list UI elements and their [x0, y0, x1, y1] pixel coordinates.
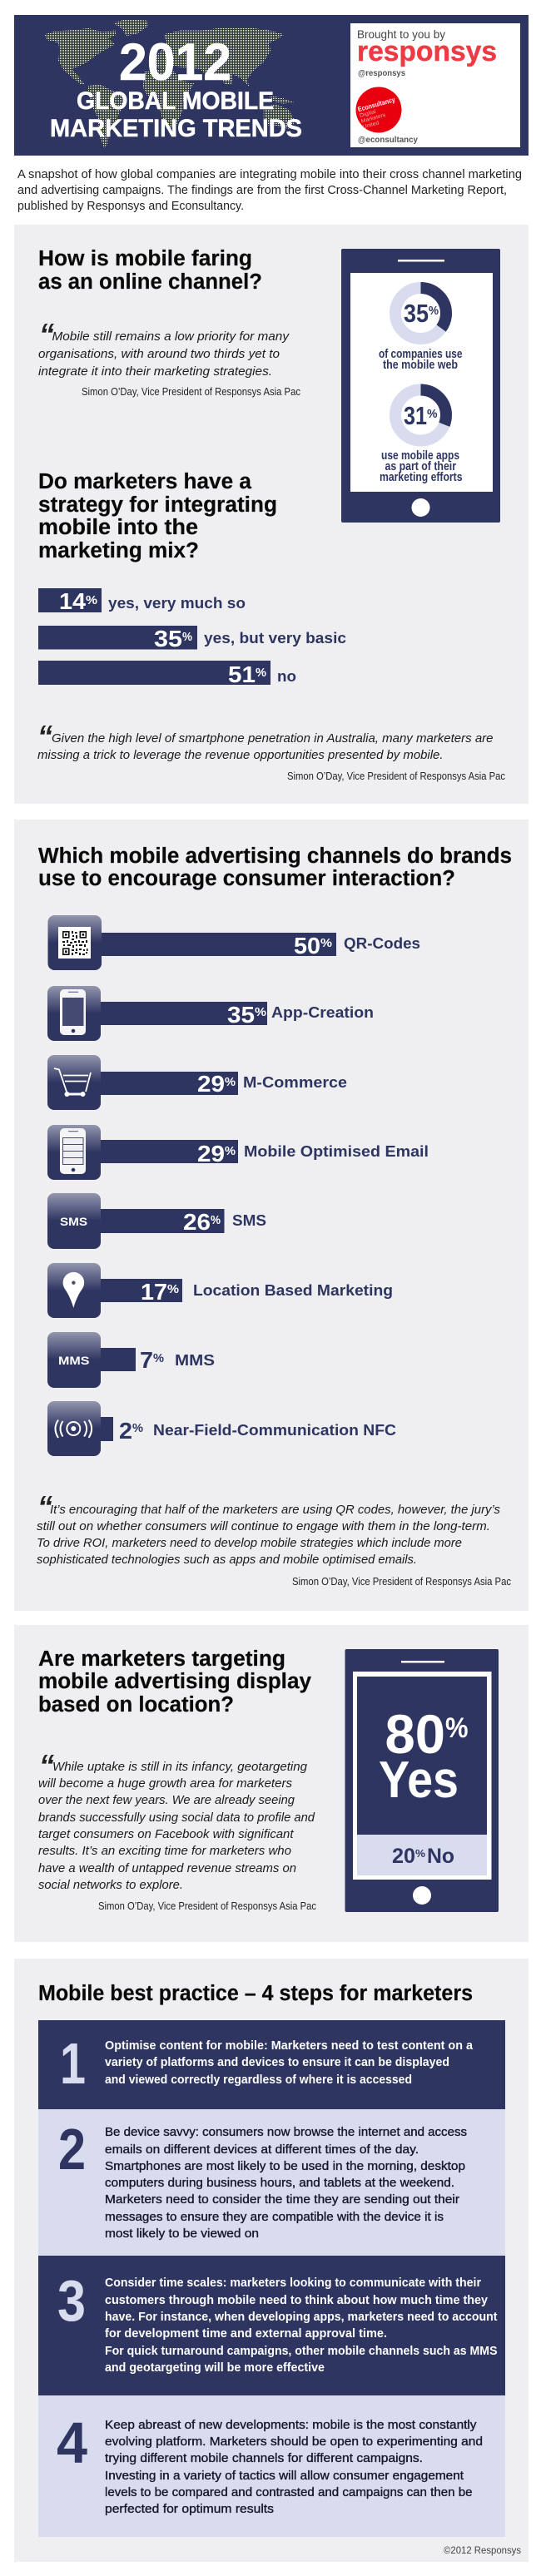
title: GLOBAL MOBILE	[77, 87, 274, 115]
quote: geotargeting: results. It’s an exciting time for marketers who	[38, 1845, 291, 1858]
bar chart: strategy: no	[277, 667, 296, 685]
heading: location: based on location?	[38, 1693, 234, 1717]
channel: M-Commerce: %	[225, 1075, 236, 1089]
step 2: 2	[58, 2117, 86, 2182]
heading: online channel: How is mobile faring	[38, 247, 252, 270]
quote: QR codes: sophisticated technologies such as apps and mobile optimised emails.	[37, 1553, 417, 1567]
heading: location	[38, 1647, 312, 1717]
step 4: Keep abreast of new developments: mobile is the most constantly	[105, 2419, 477, 2432]
step 2: most likely to be viewed on	[105, 2227, 259, 2241]
quote: QR codes: still out on whether consumers will continue to engage with them in the long-term.	[37, 1520, 490, 1533]
responsys logo: responsys	[357, 36, 497, 67]
quote: geotargeting: Simon O’Day, Vice President of Responsys Asia Pac	[98, 1900, 316, 1912]
channel: App-Creation: App-Creation	[271, 1003, 374, 1021]
channel: SMS: %	[211, 1213, 221, 1227]
icon: smartphone	[60, 989, 86, 1035]
quote: geotargeting: While uptake is still in its infancy, geotargeting	[52, 1761, 307, 1774]
heading: strategy: marketing mix?	[38, 539, 199, 562]
step 2	[38, 2109, 505, 2256]
phone with donut charts	[341, 249, 500, 523]
donut: 35%	[379, 288, 463, 372]
sponsors box: Brought to you by	[357, 28, 445, 41]
bar chart: strategy: yes, very much so	[108, 594, 246, 612]
phone: 80% yes, 20% no	[345, 1649, 499, 1912]
quote: QR codes	[37, 1489, 511, 1588]
bar chart: strategy	[38, 588, 346, 687]
step 3: and geotargeting will be more effective	[105, 2361, 325, 2375]
step 4: Investing in a variety of tactics will allow consumer engagement	[105, 2469, 464, 2483]
heading: location: mobile advertising display	[38, 1670, 312, 1693]
intro text	[17, 168, 522, 213]
donut: 35%: of companies use	[379, 348, 463, 361]
heading: channels: use to encourage consumer interaction?	[38, 867, 455, 890]
channel: MMS: MMS	[175, 1351, 215, 1369]
channel: Location Based Marketing	[47, 1263, 393, 1318]
channel: QR-Codes	[48, 915, 420, 970]
heading: location: Are marketers targeting	[38, 1647, 285, 1671]
quote: smartphone penetration: missing a trick to leverage the revenue opportunities presented by mobile.	[37, 749, 443, 762]
sponsors box: @econsultancy	[358, 135, 418, 145]
quote: low priority: Simon O’Day, Vice President of Responsys Asia Pac	[82, 386, 300, 398]
donut: 35%: 35	[404, 299, 429, 328]
step 2: computers during business hours, and tablets at the weekend.	[105, 2177, 454, 2190]
title	[50, 33, 302, 142]
sponsors box: @responsys	[358, 68, 405, 78]
channel: Mobile Optimised Email	[47, 1125, 429, 1180]
panel: best practice	[14, 1959, 529, 2562]
quote: geotargeting: have a wealth of untapped revenue streams on	[38, 1862, 296, 1875]
channel: SMS: 26	[183, 1209, 211, 1235]
step 2: Smartphones are most likely to be used in the morning, desktop	[105, 2160, 465, 2173]
step 1: Optimise content for mobile: Marketers need to test content on a	[105, 2039, 474, 2053]
icon: shopping cart	[54, 1068, 91, 1097]
channel: NFC: %	[132, 1421, 143, 1435]
step 1	[38, 2020, 505, 2109]
channel: M-Commerce: M-Commerce	[243, 1073, 347, 1091]
heading: best practice: Mobile best practice – 4 steps for marketers	[38, 1982, 473, 2005]
channel: Location Based Marketing: %	[167, 1282, 179, 1296]
quote: smartphone penetration: “	[37, 719, 52, 753]
donut: 31%: use mobile apps	[381, 449, 459, 463]
step 2: messages to ensure they are compatible with the device it is	[105, 2211, 444, 2224]
econsultancy logo: United	[362, 120, 380, 130]
bar chart: strategy: 35	[154, 626, 182, 651]
bar chart: strategy: %	[182, 630, 192, 644]
step 4: perfected for optimum results	[105, 2503, 274, 2516]
step 3: customers through mobile need to think about how much time they	[105, 2294, 488, 2307]
channel: Location Based Marketing: Location Based Marketing	[193, 1281, 393, 1299]
econsultancy logo: Digital	[359, 109, 377, 119]
step 4: evolving platform. Marketers should be open to experimenting and	[105, 2435, 483, 2449]
heading: online channel: as an online channel?	[38, 270, 262, 294]
copyright: ©2012 Responsys	[444, 2544, 521, 2556]
step 3: Consider time scales: marketers looking to communicate with their	[105, 2276, 481, 2290]
donut: 31%	[380, 389, 463, 484]
quote: geotargeting: will become a huge growth area for marketers	[38, 1777, 292, 1791]
step 4: trying different mobile channels for different campaigns.	[105, 2452, 423, 2465]
step 1: 1	[60, 2031, 86, 2096]
step 2: emails on different devices at different times of the day.	[105, 2143, 419, 2157]
channel: Mobile Optimised Email: %	[225, 1144, 236, 1158]
world map	[44, 19, 295, 148]
channel: M-Commerce: 29	[197, 1071, 225, 1097]
phone: 80% yes, 20% no: %	[415, 1847, 425, 1860]
quote: geotargeting	[38, 1748, 316, 1912]
icon: MMS: MMS	[58, 1354, 90, 1367]
step 3: for development time and external approval time.	[105, 2327, 387, 2341]
sponsors box	[350, 23, 520, 147]
step 2: Marketers need to consider the time they are sending out their	[105, 2193, 459, 2207]
heading: online channel	[38, 247, 262, 294]
channel: NFC: 2	[119, 1418, 132, 1444]
phone: 80% yes, 20% no: %	[445, 1712, 468, 1744]
donut: 31%: %	[427, 407, 438, 421]
phone: 80% yes, 20% no: 80	[385, 1703, 445, 1765]
channel: M-Commerce	[47, 1055, 347, 1110]
channel: QR-Codes: 50	[294, 933, 320, 959]
icon: SMS: SMS	[60, 1215, 87, 1228]
channel: MMS: 7	[140, 1347, 153, 1373]
step 2: Be device savvy: consumers now browse the internet and access	[105, 2126, 467, 2139]
channel: Mobile Optimised Email: 29	[197, 1141, 225, 1167]
icon: QR code	[58, 927, 91, 959]
step 1: and viewed correctly regardless of where it is accessed	[105, 2073, 412, 2087]
channel: SMS	[47, 1193, 266, 1249]
quote: QR codes: To drive ROI, marketers need to develop mobile strategies which include more	[37, 1537, 462, 1550]
quote: QR codes: It’s encouraging that half of the marketers are using QR codes, however, the jury’s	[50, 1503, 500, 1517]
channel: NFC: Near-Field-Communication NFC	[153, 1421, 396, 1439]
icon: NFC signal	[55, 1419, 92, 1438]
icon: email on smartphone	[60, 1128, 86, 1174]
quote: low priority: Mobile still remains a low priority for many	[52, 330, 290, 344]
title: MARKETING TRENDS	[50, 115, 302, 142]
heading: strategy: strategy for integrating	[38, 493, 277, 517]
channel: App-Creation: 35	[227, 1002, 255, 1028]
quote: smartphone penetration: Simon O’Day, Vice President of Responsys Asia Pac	[287, 770, 505, 782]
panel: online channel and strategy	[14, 225, 529, 804]
bar chart: strategy: yes, but very basic	[204, 629, 346, 646]
quote: low priority: organisations, with around two thirds yet to	[38, 348, 280, 361]
quote: smartphone penetration	[37, 719, 505, 782]
intro text: and advertising campaigns. The findings are from the first Cross-Channel Marketing Report,	[17, 184, 507, 197]
header banner	[14, 15, 529, 156]
channel: NFC	[47, 1401, 396, 1456]
quote: low priority	[38, 317, 300, 398]
quote: low priority: “	[39, 317, 54, 351]
donut: 35%: the mobile web	[383, 359, 458, 372]
heading: strategy: Do marketers have a	[38, 470, 252, 493]
quote: geotargeting: brands successfully using social data to profile and	[38, 1811, 315, 1825]
step 4: 4	[57, 2410, 87, 2475]
donut: 31%: 31	[404, 401, 427, 430]
channel: App-Creation: %	[255, 1005, 266, 1019]
intro text: A snapshot of how global companies are integrating mobile into their cross channel marketing	[17, 168, 522, 181]
heading: channels	[38, 845, 512, 890]
step 3: 3	[57, 2268, 86, 2333]
donut: 31%: marketing efforts	[380, 471, 463, 484]
quote: geotargeting: target consumers on Facebook with significant	[38, 1828, 294, 1841]
step 4	[38, 2395, 505, 2537]
quote: geotargeting: “	[39, 1748, 54, 1782]
phone: 80% yes, 20% no: 20	[392, 1845, 415, 1868]
bar chart: strategy: %	[86, 593, 97, 607]
donut: 31%: as part of their	[385, 460, 456, 473]
heading: channels: Which mobile advertising channels do brands	[38, 845, 512, 868]
econsultancy logo: Marketers	[360, 112, 387, 125]
channel: MMS: %	[153, 1351, 164, 1365]
quote: QR codes: “	[37, 1489, 52, 1523]
icon: map pin	[63, 1272, 84, 1308]
phone: 80% yes, 20% no: No	[427, 1845, 454, 1868]
channel: SMS: SMS	[232, 1211, 266, 1229]
channel: Location Based Marketing: 17	[141, 1279, 167, 1305]
heading: strategy: mobile into the	[38, 516, 198, 539]
quote: smartphone penetration: Given the high level of smartphone penetration in Australia, many marketers are	[52, 732, 493, 746]
channel: Mobile Optimised Email: Mobile Optimised Email	[244, 1142, 429, 1160]
step 4: levels to be compared and contrasted and campaigns can then be	[105, 2486, 473, 2499]
donut: 35%: %	[429, 304, 439, 318]
quote: low priority: integrate it into their marketing strategies.	[38, 365, 272, 379]
step 1: variety of platforms and devices to ensure it can be displayed	[105, 2056, 449, 2069]
econsultancy logo	[356, 87, 401, 133]
bar chart: strategy: %	[256, 666, 266, 680]
quote: geotargeting: over the next few years. We are already seeing	[38, 1794, 295, 1807]
step 3	[38, 2256, 505, 2395]
channel: MMS	[47, 1332, 215, 1388]
bar chart: strategy: 14	[59, 588, 86, 614]
panel: advertising channels	[14, 820, 529, 1611]
quote: geotargeting: social networks to explore.	[38, 1879, 183, 1892]
heading: strategy	[38, 470, 277, 562]
quote: QR codes: Simon O’Day, Vice President of Responsys Asia Pac	[292, 1576, 511, 1588]
intro text: published by Responsys and Econsultancy.	[17, 200, 244, 213]
title: 2012	[119, 33, 231, 92]
econsultancy logo: Econsultancy	[357, 96, 396, 113]
panel: location targeting	[14, 1625, 529, 1942]
step 3: For quick turnaround campaigns, other mobile channels such as MMS	[105, 2345, 498, 2358]
channel: App-Creation	[47, 986, 374, 1041]
channel: QR-Codes: QR-Codes	[344, 934, 420, 952]
phone: 80% yes, 20% no: Yes	[379, 1751, 459, 1809]
bar chart: strategy: 51	[228, 661, 256, 687]
step 3: have. For instance, when developing apps, marketers need to account	[105, 2311, 498, 2324]
channel: QR-Codes: %	[320, 936, 332, 950]
